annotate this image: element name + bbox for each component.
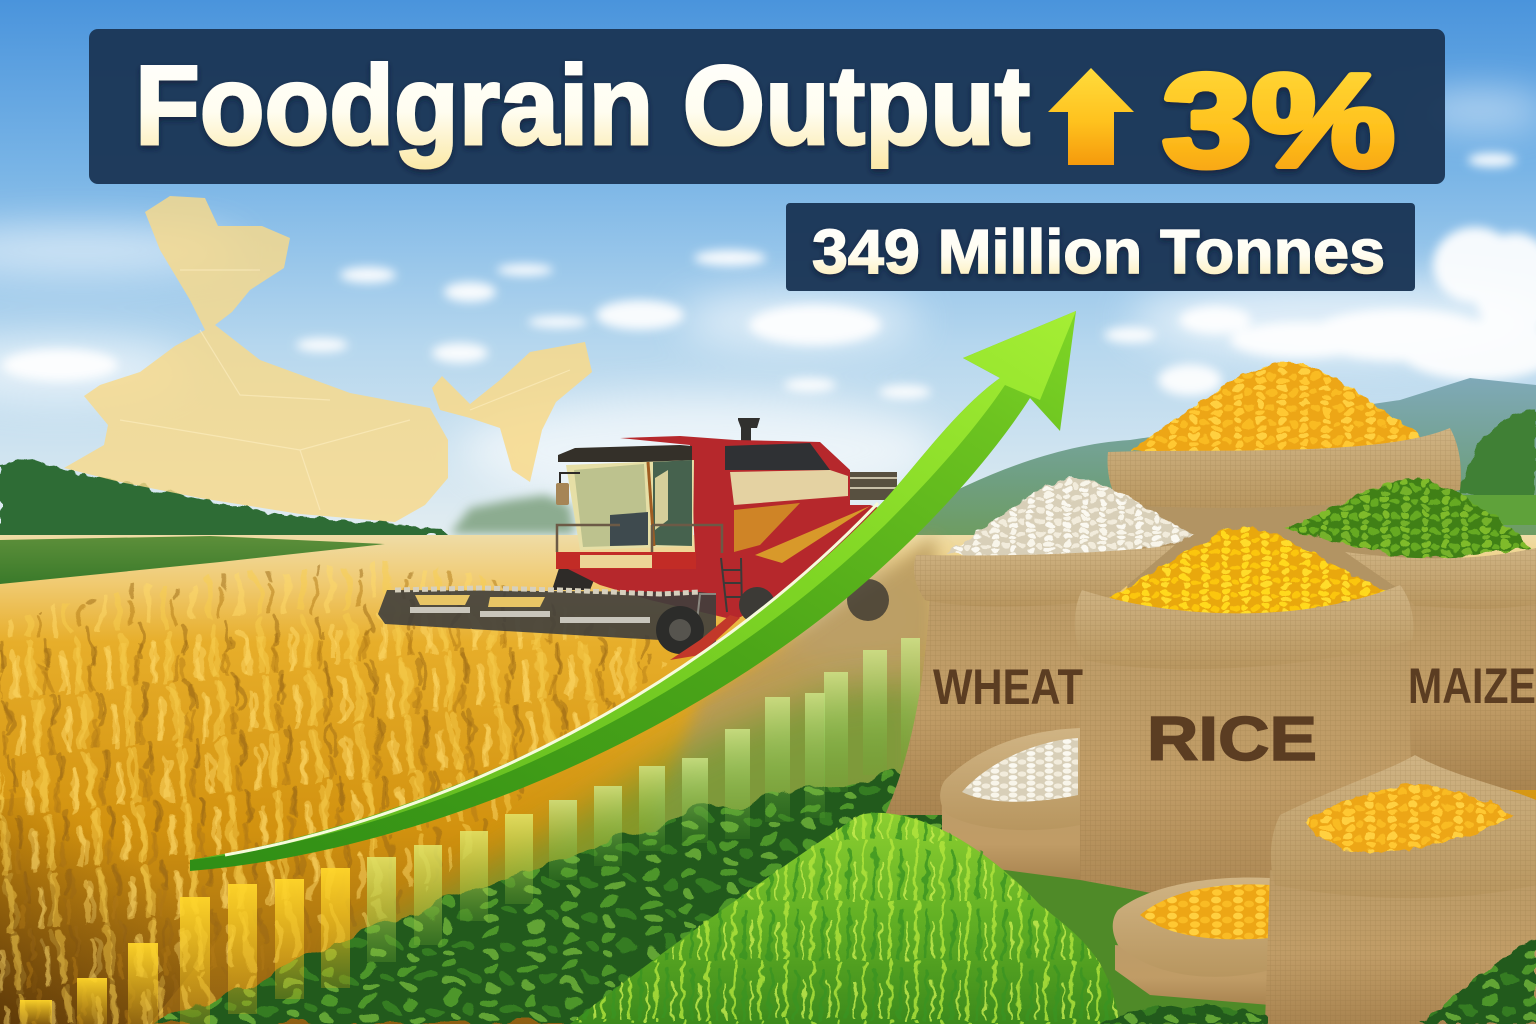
yellow body stripe (755, 506, 870, 563)
header wheel (656, 606, 704, 654)
right trees (1460, 410, 1536, 500)
side mirror (556, 473, 580, 505)
RICE label: RICE (1147, 705, 1317, 774)
upper side window (725, 443, 830, 470)
cab glass (566, 460, 694, 550)
percentage: 3% (1162, 47, 1395, 194)
icon: up arrow (1048, 68, 1134, 165)
rear wheel (847, 579, 889, 621)
growth bar chart (20, 638, 920, 1024)
tonnage banner (786, 203, 1415, 291)
exhaust pipe (738, 418, 760, 475)
back sack: lentils (1108, 362, 1461, 700)
tonnage text: 349 Million Tonnes (812, 218, 1385, 287)
red body (556, 436, 885, 620)
left green crop strip (0, 536, 385, 584)
right green field strip (1450, 495, 1536, 525)
small sack: rice (940, 728, 1080, 880)
orange side panel (734, 503, 800, 552)
grass blades (570, 813, 1120, 1024)
tree line (0, 458, 450, 540)
combine harvester (378, 418, 897, 660)
ground greenery under sacks (990, 868, 1300, 1024)
WHEAT label: WHEAT (933, 659, 1083, 715)
sack: RICE (1042, 527, 1414, 915)
lower green foliage (150, 770, 950, 1024)
wheat foreground strip (0, 625, 670, 1024)
cab roof (558, 445, 692, 462)
ladder (721, 558, 742, 612)
handrail (557, 525, 722, 553)
front wheel (739, 587, 775, 623)
map of India silhouette (64, 196, 592, 522)
foreground grass (570, 813, 1120, 1024)
sky background (0, 0, 1536, 560)
front sack: corn (1265, 755, 1536, 1024)
sack: WHEAT (885, 478, 1195, 815)
right field behind arrow (640, 535, 935, 860)
clouds (0, 94, 1536, 505)
title text: Foodgrain Output (135, 43, 1030, 168)
rear grain rack (845, 472, 897, 500)
red header arm (670, 615, 740, 660)
cream side panel (730, 470, 848, 505)
growth arrow (190, 311, 1076, 871)
hazy distant trees (450, 495, 575, 534)
sack: MAIZE (1284, 480, 1536, 790)
cab base (556, 552, 696, 569)
wheat field (0, 535, 1536, 1024)
grass at bottom right (1100, 940, 1536, 1024)
small sack: golden grain (1113, 877, 1270, 1005)
title banner (89, 29, 1445, 194)
front tyre (552, 565, 600, 590)
distant hills (900, 378, 1536, 545)
green haze under arrow (330, 680, 930, 960)
header reel (378, 588, 716, 650)
dust behind combine (780, 560, 940, 680)
